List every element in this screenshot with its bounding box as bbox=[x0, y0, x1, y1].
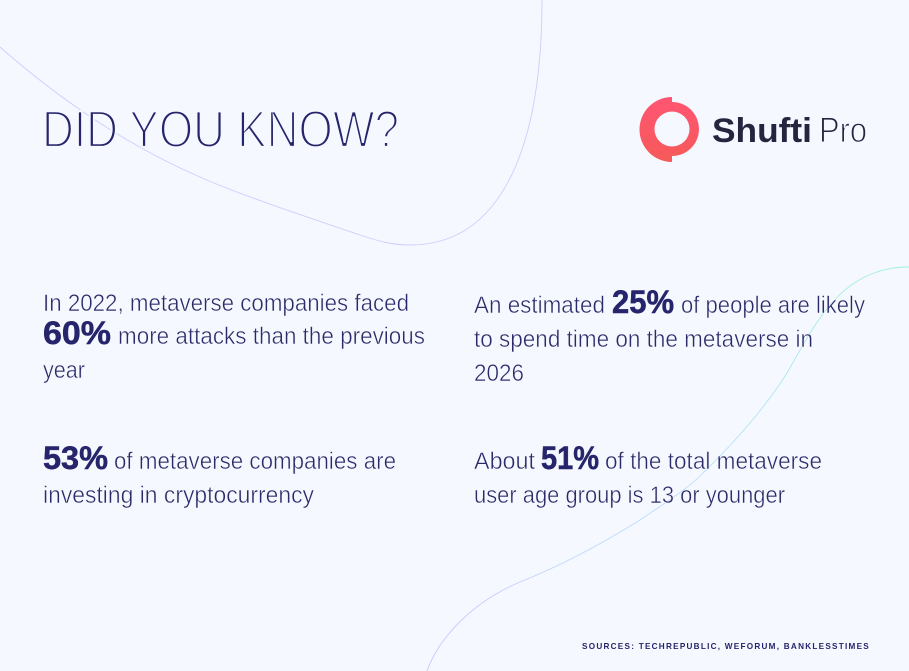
stat: 25% spend time on metaverse: An estimated bbox=[474, 292, 605, 319]
stat: 51% age 13 or younger: user age group is 13 or younger bbox=[474, 482, 785, 509]
stat: 60% more attacks: In 2022, metaverse companies faced bbox=[43, 290, 409, 317]
stat: 53% investing in cryptocurrency: 53% bbox=[43, 440, 108, 476]
stat: 53% investing in cryptocurrency: of metaverse companies are bbox=[114, 448, 396, 475]
stat: 51% age 13 or younger bbox=[474, 440, 822, 509]
sources footnote: SOURCES: TECHREPUBLIC, WEFORUM, BANKLESSTIMES bbox=[582, 641, 870, 651]
logo wordmark: Shufti: Shufti bbox=[712, 112, 812, 150]
logo: Shufti Pro bbox=[640, 97, 867, 162]
stat: 53% investing in cryptocurrency: investing in cryptocurrency bbox=[43, 482, 315, 509]
decorative curve: top purple bbox=[0, 0, 542, 245]
logo wordmark: Pro: Pro bbox=[819, 111, 867, 150]
stat: 25% spend time on metaverse: of people are likely bbox=[681, 292, 866, 319]
stat: 60% more attacks: 60% bbox=[43, 315, 111, 351]
stat: 60% more attacks: more attacks than the previous bbox=[118, 323, 425, 350]
stat: 53% investing in cryptocurrency bbox=[43, 440, 396, 509]
icon: logo ring bbox=[640, 97, 699, 162]
stat: 60% more attacks bbox=[43, 290, 425, 384]
stat: 25% spend time on metaverse bbox=[474, 284, 866, 387]
decorative curve: bottom gradient bbox=[427, 267, 909, 671]
stat: 51% age 13 or younger: of the total metaverse bbox=[605, 448, 822, 475]
stat: 25% spend time on metaverse: 2026 bbox=[474, 360, 524, 387]
stat: 25% spend time on metaverse: to spend time on the metaverse in bbox=[474, 326, 813, 353]
stat: 51% age 13 or younger: 51% bbox=[541, 440, 599, 476]
stat: 51% age 13 or younger: About bbox=[474, 448, 535, 475]
stat: 25% spend time on metaverse: 25% bbox=[612, 284, 674, 320]
title: DID YOU KNOW? bbox=[42, 101, 399, 159]
stat: 60% more attacks: year bbox=[43, 357, 85, 384]
